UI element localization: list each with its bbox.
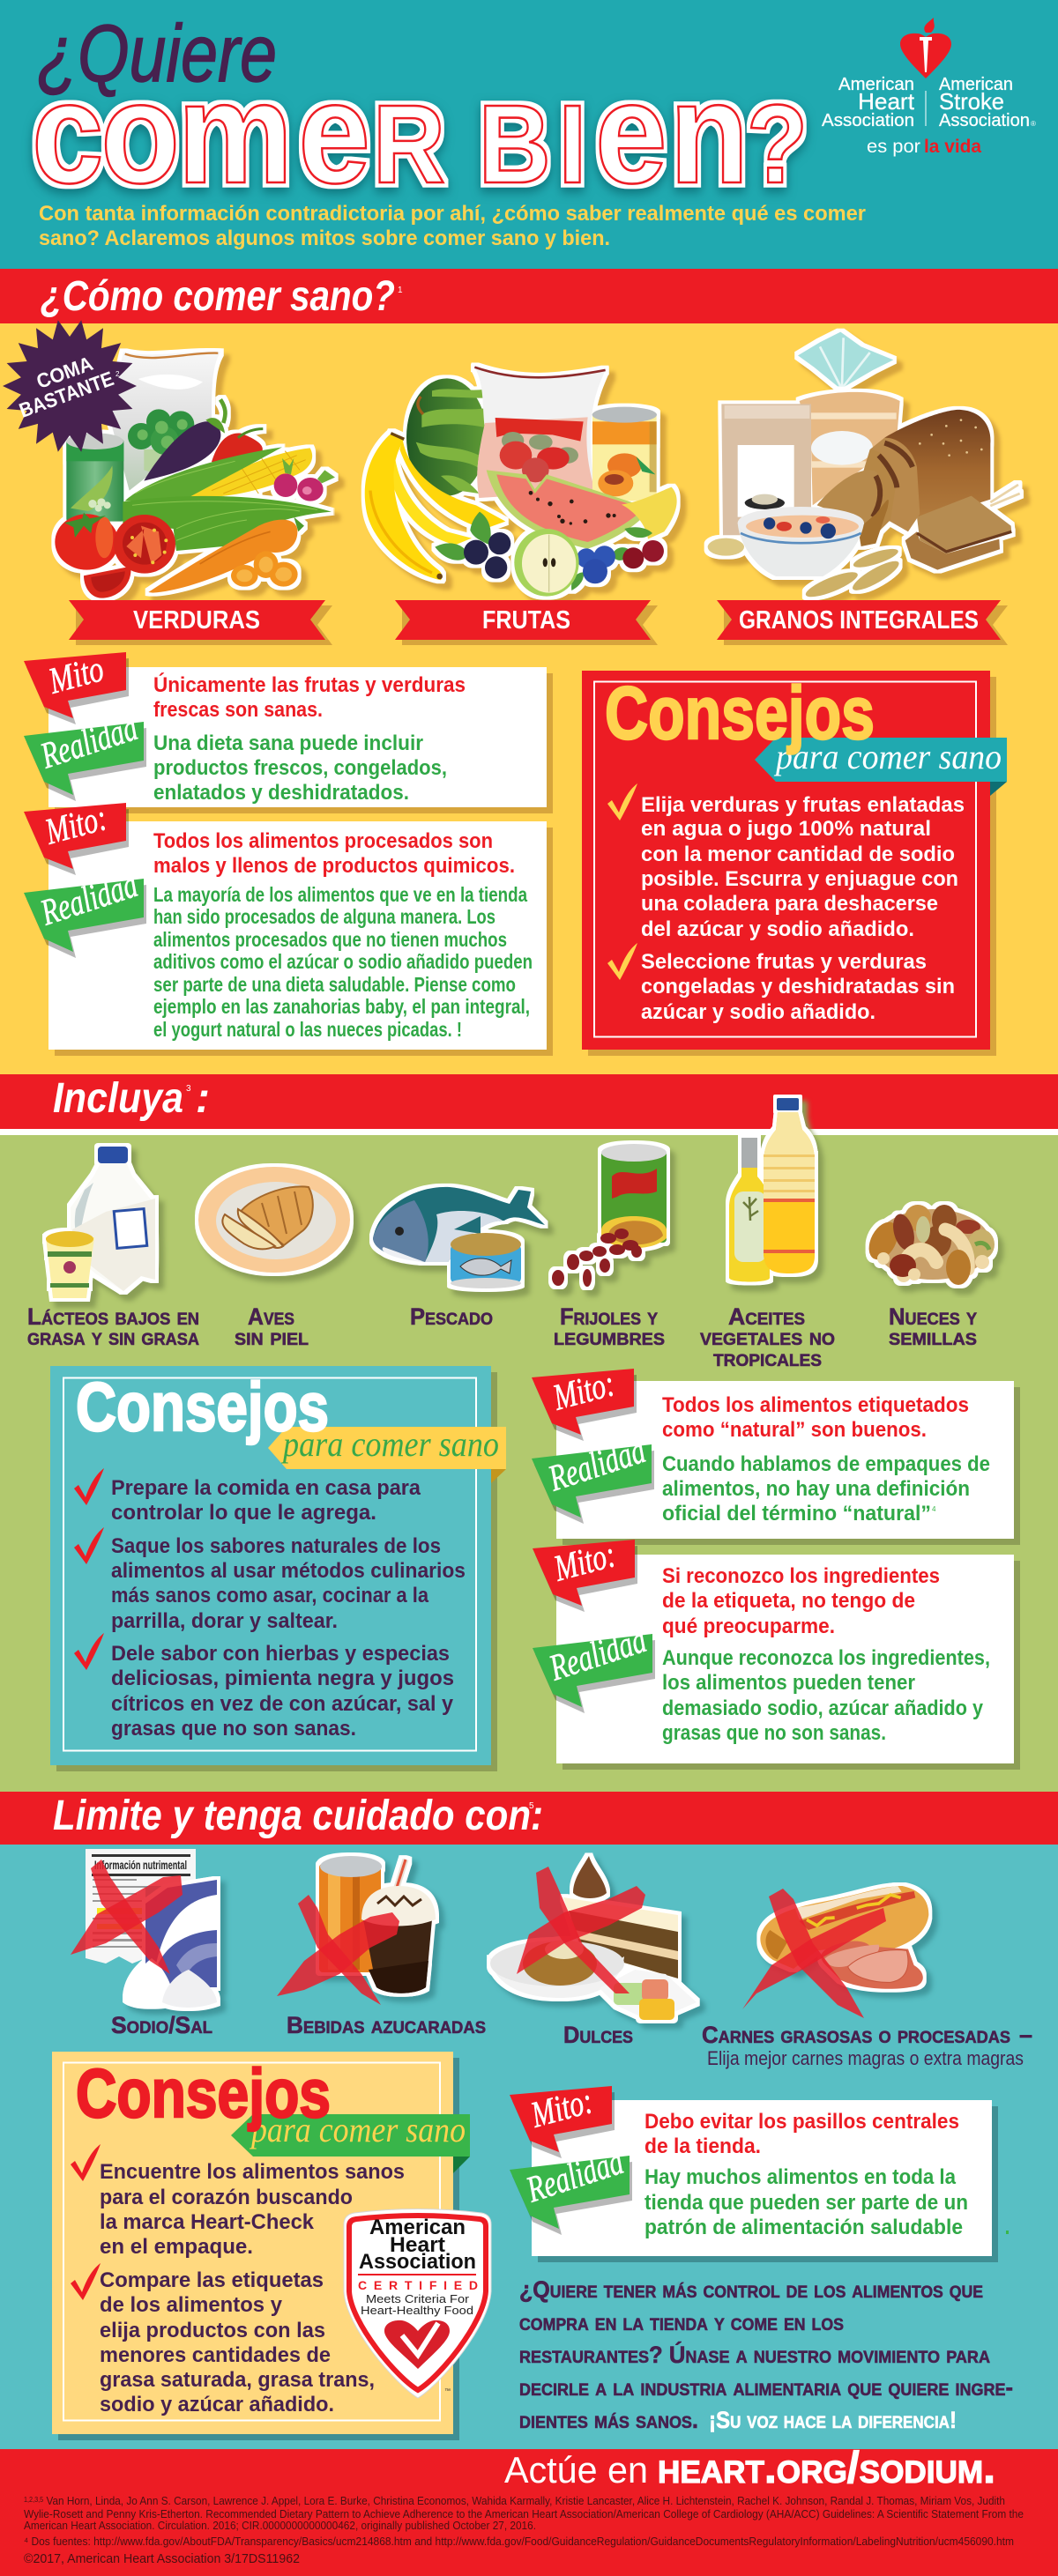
realidad text: Una dieta sana puede incluir [153,731,423,755]
realidad text: Hay muchos alimentos en toda la [644,2165,957,2189]
canned peaches [592,412,657,501]
realidad text: Cuando hablamos de empaques de [662,1452,990,1476]
teal section background [0,1845,1058,2449]
tips list: menores cantidades de [100,2343,331,2367]
tips list: de los alimentos y [100,2293,283,2317]
loaf [884,410,990,520]
flag: mito: Mito: [548,1363,619,1419]
realidad text: patrón de alimentación saludable [644,2216,963,2239]
corn husks [125,447,282,501]
illustration: granos integrales [708,332,1020,602]
large bottle [764,1112,815,1273]
pear [622,487,677,539]
tip 2: Seleccione frutas y verduras [641,950,927,974]
cup [363,1919,432,1993]
logo: American Heart / Stroke Association: Association [822,111,914,130]
references: 1,2,3,5 [24,2496,44,2504]
food labels: incluya [27,1303,977,1371]
heading: incluya: : [196,1075,210,1122]
mito text: Si reconozco los ingredientes [662,1564,940,1588]
food labels: limite: Carnes grasosas o procesadas [702,2022,1010,2048]
food labels: incluya: semillas [889,1324,977,1350]
ribbon: granos integrales: GRANOS INTEGRALES [739,606,979,635]
badge: heart-check certified: CERTIFIED [358,2278,478,2292]
radishes [282,458,294,474]
flag: mito [532,1363,637,1441]
tips list [74,1468,466,1741]
nutrition label: Información nutrimental [94,1858,187,1872]
heading: cómo comer sano: 1 [398,286,403,295]
food labels: limite: Dulces [563,2022,633,2048]
tip 1: posible. Escurra y enjuague con [641,867,958,891]
title line 2: c [32,53,104,213]
tips list: Encuentre los alimentos sanos [100,2160,405,2184]
call to action text [519,2276,1013,2433]
flag: mito: Mito: [41,798,111,853]
tip 1: en agua o jugo 100% natural [641,817,931,841]
food labels: limite: Bebidas azucaradas [287,2012,486,2038]
flag: mito: Mito: [526,2081,597,2136]
footer call to action: heart.org/sodium. [658,2443,995,2492]
realidad text: grasas que no son sanas. [662,1721,886,1745]
leaves [470,512,491,545]
panel: mito 4 [533,1534,1020,1770]
tips list: Dele sabor con hierbas y especias [111,1642,450,1666]
ribbon: para comer sano [755,737,1007,796]
mito text [662,1393,969,1442]
bowl [738,523,864,576]
tips list: Prepare la comida en casa para [111,1476,421,1500]
realidad text [153,731,447,805]
tips list: cítricos en vez de con azúcar, sal y [111,1692,454,1716]
lower slices [905,531,1000,570]
section band: limite [0,1792,1058,1845]
callout: coma bastante starburst [3,320,137,452]
ribbon: verduras: VERDURAS [133,606,260,635]
food labels: incluya: Aves [248,1303,294,1330]
wheat [708,538,902,602]
callout: coma bastante starburst: 2 [115,370,120,378]
intro text: sano? Aclaremos algunos mitos sobre comer sano y bien. [39,226,610,250]
mito text: Únicamente las frutas y verduras [153,672,466,697]
realidad text: oficial del término “natural” [662,1502,931,1526]
bag of fruit [474,367,606,498]
realidad text: el yogurt natural o las nueces picadas. ! [153,1018,462,1041]
realidad text: ejemplo en las zanahorias baby, el pan integral, [153,995,530,1018]
nutrition label [86,1849,196,1964]
illustration: frutas [365,367,677,597]
flag: realidad [533,1620,655,1713]
badge: heart-check certified: Meets Criteria For [366,2292,470,2305]
flag: mito [510,2081,615,2158]
flag: realidad [24,708,146,801]
intro text: Con tanta información contradictoria por ahí, ¿cómo saber realmente qué es comer [39,202,866,226]
heading: limite y tenga cuidado: Limite y tenga cuidado con: [53,1793,543,1839]
illustration: sodio [71,1849,217,2008]
panel: consejos amarillo [52,2052,470,2440]
tomato slice [114,515,175,574]
icon: heart check [384,2320,450,2369]
food labels: limite: Elija mejor carnes magras o extra magras [707,2047,1024,2069]
tip 2 [641,950,955,1024]
bag [108,352,220,491]
mito text: qué preocuparme. [662,1615,835,1638]
badge: heart-check certified [344,2209,491,2398]
yogurt [46,1237,94,1298]
call to action text: dientes más sanos. [519,2407,698,2433]
ribbon: granos integrales [717,600,1008,645]
mito text: como “natural” son buenos. [662,1418,927,1442]
title line 2: m [178,53,293,213]
realidad text: Aunque reconozca los ingredientes, [662,1646,990,1670]
logo: American Heart / Stroke Association: American [939,75,1013,94]
icon: check [74,1527,104,1564]
icon: check [607,943,637,980]
ribbon: para comer sano: para comer sano [249,2110,466,2149]
illustration: carnes [742,1886,928,2018]
ribbon: frutas: FRUTAS [482,606,570,635]
food labels: limite [111,2012,1032,2069]
realidad text: han sido procesados de alguna manera. Los [153,905,495,928]
references: American Heart Association. Circulation. 2016; CIR.0000000000000462, originally published October 27, 2016. [24,2519,536,2532]
logo: American Heart / Stroke Association: American [838,75,914,94]
references: ©2017, American Heart Association 3/17DS11962 [24,2551,300,2566]
mito text: de la etiqueta, no tengo de [662,1589,915,1613]
references [24,2494,1024,2566]
call to action text: ¡Su voz hace la diferencia! [709,2407,957,2433]
heading: cómo comer sano: ¿Cómo comer sano? [41,273,395,320]
apple half [514,529,579,597]
tips list: grasas que no son sanas. [111,1717,356,1741]
badge: heart-check certified: American [369,2216,466,2239]
illustration: lácteos [46,1147,155,1298]
heading: consejos: Consejos [76,2054,331,2132]
logo: American Heart / Stroke Association [822,18,1036,157]
tips list: deliciosas, pimienta negra y jugos [111,1667,454,1690]
logo: American Heart / Stroke Association: es por [867,137,920,157]
tips list: Compare las etiquetas [100,2268,324,2292]
footer call to action [504,2443,995,2492]
ribbon: verduras [69,600,332,645]
icon: check [71,2144,101,2181]
footer call to action: Actúe en [504,2449,648,2491]
mito text: Todos los alimentos procesados son [153,829,493,853]
realidad text [644,2165,968,2239]
watermelon slice [487,470,649,549]
heading: limite y tenga cuidado: 5 [529,1801,534,1811]
mito text [662,1564,940,1638]
corn [188,448,312,497]
logo: American Heart / Stroke Association: Association [939,111,1030,130]
food labels: incluya: sin piel [235,1324,309,1350]
flag: mito [533,1534,637,1612]
green dot [1006,2231,1009,2234]
realidad text: enlatados y deshidratados. [153,781,409,805]
jug [71,1162,155,1291]
tips list: para el corazón buscando [100,2186,353,2209]
title line 2: e [298,53,370,213]
title line 2: o [101,53,180,213]
candies [600,1970,697,2020]
flag: realidad: Realidad [35,865,143,934]
icon: check [607,783,637,820]
food labels: incluya: Pescado [410,1303,493,1330]
badge: heart-check certified: ™ [444,2388,451,2394]
mito text [153,829,515,878]
illustration: pescado [373,1187,545,1288]
logo: American Heart / Stroke Association: Stroke [939,88,1004,115]
ribbon: para comer sano: para comer sano [773,737,1002,776]
broccoli [144,449,165,473]
title line 2: R [373,82,445,206]
title line 2: I [559,82,586,206]
small bottle [741,1138,757,1168]
tip 1: Elija verduras y frutas enlatadas [641,793,965,817]
realidad text: demasiado sodio, azúcar añadido y [662,1696,984,1720]
panel: mito 5 [510,2081,998,2262]
food labels: incluya: Nueces y [889,1303,977,1330]
flag: realidad [532,1430,654,1524]
illustration: nueces [863,1205,995,1285]
call to action text: decirle a la industria alimentaria que quiere ingre- [519,2374,1013,2401]
title line 1: ¿Quiere [37,9,277,99]
tip 1: una coladera para deshacerse [641,892,938,916]
white divider [0,1129,1058,1135]
can [319,1864,381,1972]
flour bag [721,404,811,535]
tips list: elija productos con las [100,2319,325,2342]
straw [395,1860,406,1893]
illustration: dulces [490,1856,697,2020]
callout: coma bastante starburst: BASTANTE [16,367,116,422]
realidad text: aditivos como el azúcar o sodio añadido pueden [153,950,533,973]
watermelon [406,378,487,496]
callout: coma bastante starburst: COMA [34,352,96,393]
illustration: frijoles [552,1144,667,1287]
tips list: la marca Heart-Check [100,2210,315,2234]
realidad text: 4 [932,1505,936,1513]
flag: realidad [24,865,146,958]
panel: consejos turquesa [50,1366,506,1771]
tip 1: del azúcar y sodio añadido. [641,917,914,941]
ribbon: para comer sano [268,1424,506,1483]
realidad text: tienda que pueden ser parte de un [644,2191,968,2215]
food labels: incluya: vegetales no [700,1324,835,1350]
food labels: incluya: tropicales [713,1345,822,1371]
flag: realidad [510,2142,632,2235]
tip 1: con la menor cantidad de sodio [641,843,955,866]
bread bag tie [798,332,893,386]
tuna can [451,1244,521,1283]
icon: red X [71,1860,183,1974]
heading: consejos: Consejos [76,1368,329,1445]
can [66,439,123,522]
tip 1 [641,793,965,941]
call to action text: ¿Quiere tener más control de los alimentos que [519,2276,983,2303]
flag: realidad: Realidad [543,1430,651,1500]
flag: mito [24,649,129,724]
title line 2: e [595,53,667,213]
food labels: incluya: Frijoles y [560,1303,658,1330]
sticks [990,485,1020,506]
title line 2: n [670,53,749,213]
mito text [644,2110,959,2158]
panel: consejos rojo [582,671,1007,1056]
flag: mito: Mito: [549,1534,620,1590]
realidad text: los alimentos pueden tener [662,1671,915,1695]
realidad text [153,883,533,1041]
yellow section background [0,323,1058,1074]
icon: red X [277,1895,399,2005]
berries [464,540,488,565]
flag: realidad: Realidad [35,708,143,777]
section band: cómo comer sano [0,269,1058,323]
header band [0,0,1058,269]
footer band [0,2449,1058,2576]
pepper [212,434,263,467]
badge: heart-check certified: Association [359,2250,476,2274]
ribbon: frutas [395,600,658,645]
flag: mito: Mito [44,649,108,702]
food labels: incluya: legumbres [554,1324,665,1350]
realidad text: ser parte de una dieta saludable. Piense como [153,973,516,996]
tip 2: congeladas y deshidratadas sin [641,975,955,998]
logo: American Heart / Stroke Association: Heart [858,88,915,115]
mito text: malos y llenos de productos quimicos. [153,854,515,878]
food labels: incluya: grasa y sin grasa [27,1324,199,1350]
panel: mito 2 [24,798,553,1056]
tips list: Saque los sabores naturales de los [111,1534,441,1558]
icon: red X [742,1889,886,2018]
heading: consejos: Consejos [605,672,875,754]
salt piles [126,1958,175,2006]
flag: realidad: Realidad [544,1620,652,1689]
logo: American Heart / Stroke Association: ® [1031,120,1036,128]
tips list: en el empaque. [100,2235,253,2259]
realidad text: productos frescos, congelados, [153,756,447,780]
icon: check [74,1468,104,1505]
tips list: sodio y azúcar añadido. [100,2393,334,2416]
tips list: alimentos al usar métodos culinarios [111,1559,466,1583]
tips list [71,2144,405,2416]
heading: incluya: 3 [186,1084,191,1094]
title line 2: ? [747,82,808,206]
green section background [0,1135,1058,1792]
mito text [153,672,466,722]
bread bag [800,392,900,505]
carrot [148,520,297,593]
tomato [55,514,118,570]
call to action text: compra en la tienda y come en los [519,2309,844,2335]
tips list: parrilla, dorar y saltear. [111,1609,338,1633]
section band: incluya [0,1074,1058,1129]
food labels: limite: Sodio/Sal [111,2012,212,2038]
panel: mito 1 [24,649,553,813]
illustration: aves [198,1167,350,1273]
realidad text: alimentos procesados que no tienen muchos [153,928,507,951]
realidad text: La mayoría de los alimentos que ve en la tienda [153,883,527,906]
badge: heart-check certified: Heart-Healthy Food [361,2304,473,2317]
icon: red X [517,1867,645,1993]
icon: heart and torch [900,18,951,78]
flag: realidad: Realidad [521,2142,629,2211]
tips list: más sanos como asar, cocinar a la [111,1584,429,1607]
heading: incluya: Incluya [53,1075,183,1122]
flag: mito [24,798,129,875]
panel: mito 3 [532,1363,1020,1545]
eggplant [144,421,220,481]
food labels: incluya: Aceites [728,1303,805,1330]
illustration: bebidas [277,1856,436,2005]
illustration: aceites [729,1098,815,1281]
realidad text: alimentos, no hay una definición [662,1477,970,1501]
tips list: grasa saturada, grasa trans, [100,2368,375,2392]
bananas [399,439,505,529]
cake [563,1897,678,1978]
mito text: de la tienda. [644,2134,761,2158]
tips list: controlar lo que le agrega. [111,1501,376,1525]
logo: American Heart / Stroke Association: la vida [924,137,981,157]
intro text [39,202,866,250]
ribbon: para comer sano: para comer sano [280,1424,499,1464]
illustration: verduras [55,352,335,598]
ribbon: para comer sano [231,2110,470,2173]
tip 2: azúcar y sodio añadido. [641,1000,875,1024]
call to action text: restaurantes? Únase a nuestro movimiento para [519,2341,990,2368]
food labels: limite: – [1019,2022,1032,2048]
title [32,9,808,213]
realidad text [662,1646,990,1745]
salt box [126,1880,217,2008]
mito text: Todos los alimentos etiquetados [662,1393,969,1417]
icon: check [71,2263,101,2300]
food labels: incluya: Lácteos bajos en [27,1303,199,1330]
icon: check [74,1633,104,1670]
mito text: frescas son sanas. [153,698,323,722]
realidad text [662,1452,990,1526]
badge: heart-check certified: Heart [390,2233,445,2257]
bowl [490,1956,624,1998]
title line 2: B [479,82,551,206]
mito text: Debo evitar los pasillos centrales [644,2110,959,2134]
